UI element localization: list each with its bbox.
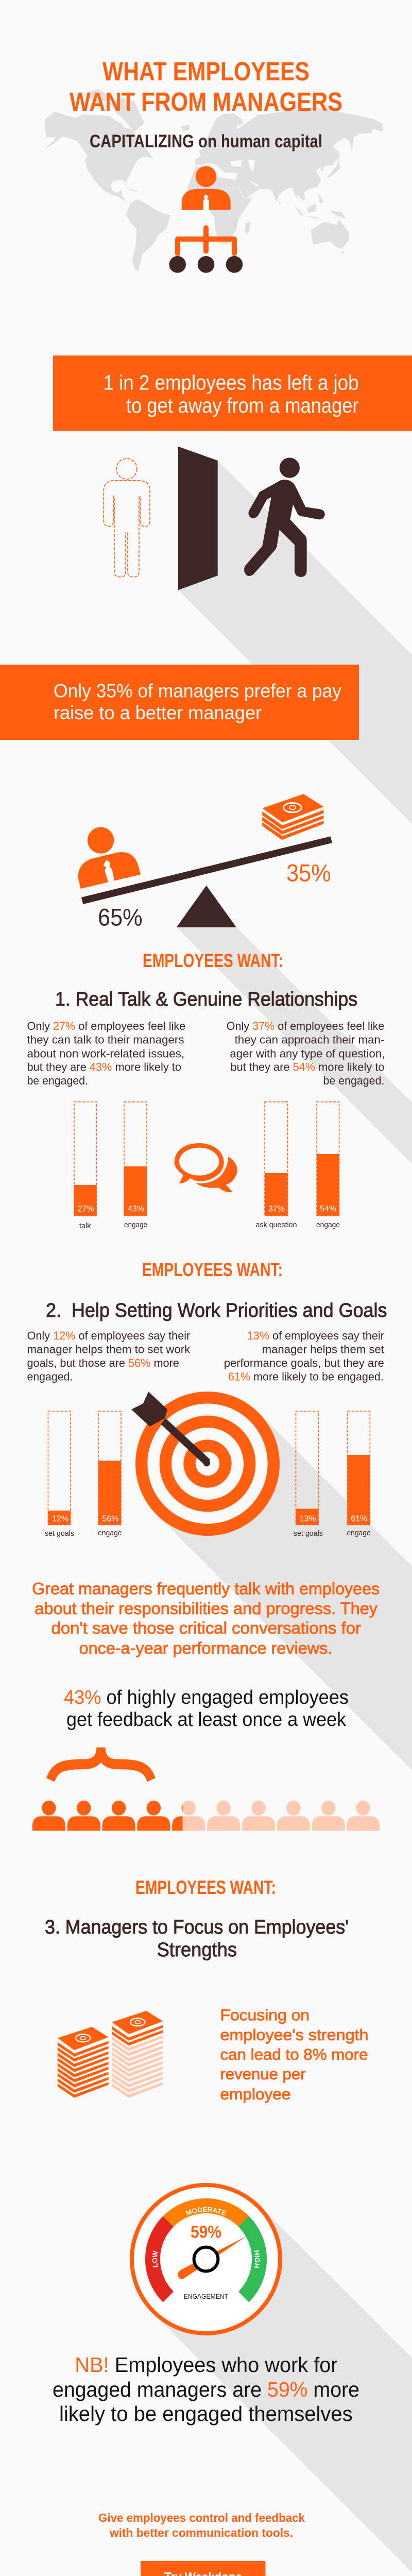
world map background (44, 89, 383, 272)
icon: two money stacks (58, 2011, 163, 2098)
text block: NB 59% (53, 2353, 359, 2426)
gauge: engagement (130, 2183, 282, 2335)
button: try weekdone (141, 2561, 265, 2576)
bar: engage 54%: engage (316, 1221, 340, 1229)
gauge segment: high (244, 2222, 260, 2297)
gauge value: 59% (191, 2223, 221, 2242)
text block: great managers: about their responsibilities and progress. They (35, 1599, 377, 1618)
heading: focus on strengths: Strengths (157, 1939, 237, 1961)
text block: 43% feedback: get feedback at least once a week (66, 1709, 347, 1731)
banner: only 35% of managers: raise to a better manager (54, 702, 262, 723)
bar: ask question 37% (255, 1102, 297, 1229)
text block: NB 59%: likely to be engaged themselves (59, 2402, 353, 2426)
bar: engage 56% (98, 1411, 122, 1537)
text block: 13% performance goals (224, 1329, 385, 1383)
bar: set goals 13%: set goals (294, 1529, 323, 1538)
text block: great managers: once-a-year performance reviews. (79, 1639, 332, 1657)
icon: door (178, 447, 218, 590)
icon: manager with org chart (169, 166, 243, 273)
text block: 8% more revenue (220, 2006, 369, 2103)
gauge: engagement: MODERATE (185, 2207, 227, 2215)
banner: 1 in 2 employees: to get away from a manager (126, 394, 358, 417)
gauge: engagement: ENGAGEMENT (184, 2293, 228, 2300)
text block: 27% talk: but they are 43% more likely to (27, 1060, 181, 1073)
people row: 43% highlighted (32, 1801, 380, 1831)
heading: focus on strengths: 3. Managers to Focus on Employees' (45, 1917, 349, 1938)
heading: employees want 1: EMPLOYEES WANT: (143, 950, 283, 971)
bar: set goals 13% (294, 1411, 323, 1538)
text block: 8% more revenue: employee (220, 2085, 290, 2103)
bar: engage 54%: 54% (320, 1204, 336, 1214)
text block: great managers: Great managers frequently talk with employees (32, 1579, 380, 1598)
text block: call to action (98, 2511, 305, 2539)
heading: work priorities: 2. Help Setting Work Priorities and Goals (46, 1300, 387, 1321)
text block: 27% talk: about non work-related issues, (27, 1047, 184, 1060)
icon: target with dart (131, 1392, 280, 1536)
gauge segment: moderate (168, 2206, 244, 2222)
text block: 27% talk: Only 27% of employees feel like (27, 1020, 185, 1032)
bar: engage 56%: 56% (102, 1514, 118, 1523)
icon: money stack (262, 794, 324, 840)
bar: engage 61% (347, 1411, 371, 1537)
bar: engage 61%: 61% (351, 1514, 367, 1523)
bar: ask question 37%: ask question (255, 1221, 297, 1229)
text block: 13% performance goals: performance goals, but they are (224, 1357, 384, 1369)
bar: engage 43%: engage (124, 1221, 147, 1229)
bar: engage 43% (124, 1102, 147, 1229)
banner: 1 in 2 employees: 1 in 2 employees has left a job (103, 371, 358, 395)
text block: NB 59%: NB! Employees who work for (75, 2353, 338, 2377)
text block: 37% question: ager with any type of question, (230, 1047, 385, 1060)
title: WANT FROM MANAGERS (70, 87, 342, 116)
long shadow: gauge (152, 2206, 412, 2572)
icon: tilted manager (78, 827, 141, 889)
icon: dashed person outline (104, 459, 150, 577)
text block: 12% set goals: Only 12% of employees say their (27, 1329, 191, 1342)
banner: 1 in 2 employees (53, 355, 412, 431)
text block: 27% talk (27, 1020, 185, 1087)
text block: 37% question (227, 1020, 385, 1087)
bar: talk 27%: 27% (77, 1204, 94, 1214)
text block: 43% feedback (64, 1687, 349, 1731)
text block: 37% question: be engaged. (323, 1074, 384, 1087)
value: 65%: 65% (98, 904, 143, 931)
text block: 13% performance goals: 61% more likely to be engaged. (228, 1370, 384, 1383)
gauge segment: low (152, 2222, 168, 2297)
gauge: engagement: LOW (152, 2250, 158, 2267)
long shadow: target (157, 1413, 412, 1770)
bar: talk 27% (74, 1102, 97, 1230)
text block: great managers (32, 1579, 380, 1657)
bar: engage 56%: engage (98, 1529, 122, 1537)
subtitle: CAPITALIZING on human capital (90, 131, 322, 151)
text block: 8% more revenue: can lead to 8% more (220, 2045, 368, 2063)
long shadow: seesaw (177, 927, 412, 1164)
text block: 37% question: Only 37% of employees feel like (227, 1020, 384, 1032)
bar: engage 54% (316, 1102, 340, 1229)
banner: only 35% of managers (0, 665, 359, 740)
gauge: engagement: HIGH (254, 2250, 260, 2268)
text block: 12% set goals (27, 1329, 191, 1383)
text block: 12% set goals: manager helps them to set work (27, 1343, 191, 1356)
text block: 13% performance goals: manager helps them set (262, 1343, 385, 1356)
bar: set goals 12% (45, 1411, 74, 1538)
text block: 27% talk: be engaged. (27, 1074, 88, 1087)
text block: 27% talk: they can talk to their managers (27, 1033, 184, 1046)
bar: set goals 12%: 12% (52, 1514, 68, 1523)
gauge needle (178, 2236, 247, 2279)
icon: chat bubbles (175, 1143, 237, 1192)
text block: 37% question: they can approach their man- (235, 1033, 384, 1046)
bar: talk 27%: talk (79, 1222, 91, 1230)
fulcrum (177, 886, 236, 927)
title: WHAT EMPLOYEES (102, 57, 310, 86)
text block: call to action: with better communication tools. (109, 2526, 293, 2539)
text block: 8% more revenue: Focusing on (220, 2006, 310, 2024)
bar: ask question 37%: 37% (268, 1204, 285, 1214)
long shadow: door (178, 461, 412, 824)
text block: call to action: Give employees control and feedback (98, 2511, 305, 2524)
text block: 37% question: but they are 54% more likely to (231, 1060, 384, 1073)
text block: 12% set goals: goals, but those are 56% more (27, 1357, 179, 1369)
text block: 13% performance goals: 13% of employees say their (247, 1329, 384, 1342)
plank (81, 836, 332, 904)
bar: engage 61%: engage (347, 1529, 371, 1537)
banner: only 35% of managers: Only 35% of managers prefer a pay (54, 680, 341, 702)
text block: 8% more revenue: revenue per (220, 2065, 306, 2083)
icon: walking person (244, 457, 325, 577)
heading: employees want 3: EMPLOYEES WANT: (135, 1877, 276, 1898)
seesaw chart: manager vs pay raise (78, 794, 332, 931)
value: 35%: 35% (286, 859, 331, 887)
text block: 8% more revenue: employee's strength (220, 2026, 369, 2044)
text block: NB 59%: engaged managers are 59% more (53, 2378, 359, 2401)
text block: 43% feedback: 43% of highly engaged employees (64, 1687, 349, 1708)
title (70, 57, 342, 116)
bar: engage 43%: 43% (128, 1204, 144, 1214)
text block: great managers: don't save those critical conversations for (52, 1619, 361, 1637)
bar: set goals 12%: set goals (45, 1529, 74, 1538)
heading: real talk: 1. Real Talk & Genuine Relationships (55, 989, 357, 1010)
icon: brace (50, 1748, 151, 1780)
bar: set goals 13%: 13% (300, 1514, 316, 1523)
heading: employees want 2: EMPLOYEES WANT: (142, 1259, 283, 1280)
text block: 12% set goals: engaged. (27, 1370, 73, 1383)
heading: focus on strengths (45, 1917, 349, 1961)
